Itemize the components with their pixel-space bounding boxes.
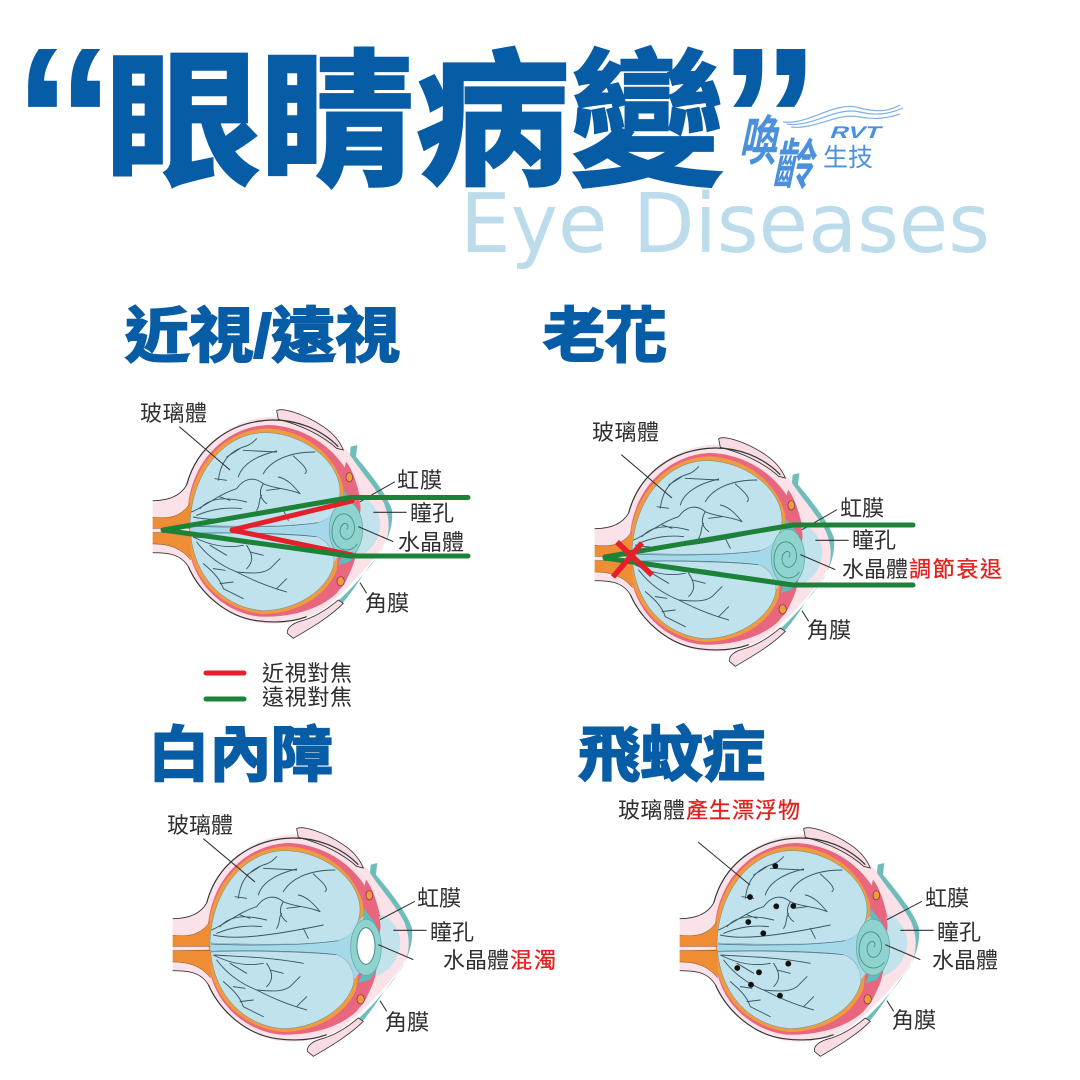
labels: 瞳孔: [430, 920, 474, 945]
heading: myopia / hyperopia: 近視/遠視: [125, 303, 400, 370]
title: 眼睛病變: [105, 41, 725, 205]
logo: [735, 105, 903, 196]
labels: 玻璃體: [592, 420, 659, 445]
labels: 瞳孔: [410, 501, 454, 526]
panel: cataract eye: [167, 813, 556, 1056]
panel: presbyopia eye: [592, 420, 1002, 666]
labels: 水晶體: [842, 557, 908, 582]
title: [13, 5, 820, 234]
labels: 瞳孔: [937, 920, 981, 945]
logo: RVT: [828, 123, 885, 142]
focus lines: [605, 525, 913, 585]
labels: 水晶體: [398, 530, 464, 555]
heading: presbyopia: 老花: [543, 303, 667, 370]
labels: 調節衰退: [909, 557, 1002, 582]
logo: 齡: [769, 136, 822, 196]
labels: 瞳孔: [852, 528, 896, 553]
eye diagram: [173, 828, 427, 1056]
eye diagram: [153, 410, 407, 638]
subtitle: Eye Diseases: Eye Diseases: [460, 177, 990, 272]
labels: 水晶體: [443, 948, 509, 973]
labels: 虹膜: [925, 886, 969, 911]
labels: 玻璃體: [167, 813, 233, 838]
eye diagram: [595, 438, 849, 666]
labels: [140, 401, 464, 616]
labels: 產生漂浮物: [686, 798, 800, 823]
labels: 角膜: [385, 1010, 429, 1035]
labels: [167, 813, 556, 1035]
panel: floaters eye: [618, 798, 998, 1056]
logo: 喚: [735, 112, 786, 173]
labels: 虹膜: [397, 468, 442, 493]
legend: 遠視對焦: [262, 685, 352, 710]
labels: 混濁: [510, 948, 556, 973]
labels: [618, 798, 998, 1033]
labels: 玻璃體: [140, 401, 207, 426]
red cross: [613, 542, 652, 577]
title: ”: [718, 5, 820, 234]
legend: [206, 661, 352, 710]
labels: 角膜: [365, 591, 409, 616]
labels: 虹膜: [417, 886, 461, 911]
logo: 生技: [823, 144, 873, 172]
labels: 角膜: [892, 1008, 936, 1033]
labels: 虹膜: [840, 496, 884, 521]
labels: 水晶體: [932, 948, 998, 973]
heading: floaters: 飛蚊症: [578, 722, 765, 789]
legend: 近視對焦: [262, 661, 352, 686]
eye diagram: [680, 828, 934, 1056]
labels: 角膜: [807, 618, 851, 643]
labels: [592, 420, 1002, 643]
floaters dots: [734, 863, 796, 999]
heading: cataract: 白內障: [148, 722, 333, 789]
focus lines: [163, 498, 468, 556]
labels: 玻璃體: [618, 798, 685, 823]
title: “: [13, 5, 116, 234]
panel: myopia hyperopia eye: [140, 401, 468, 638]
